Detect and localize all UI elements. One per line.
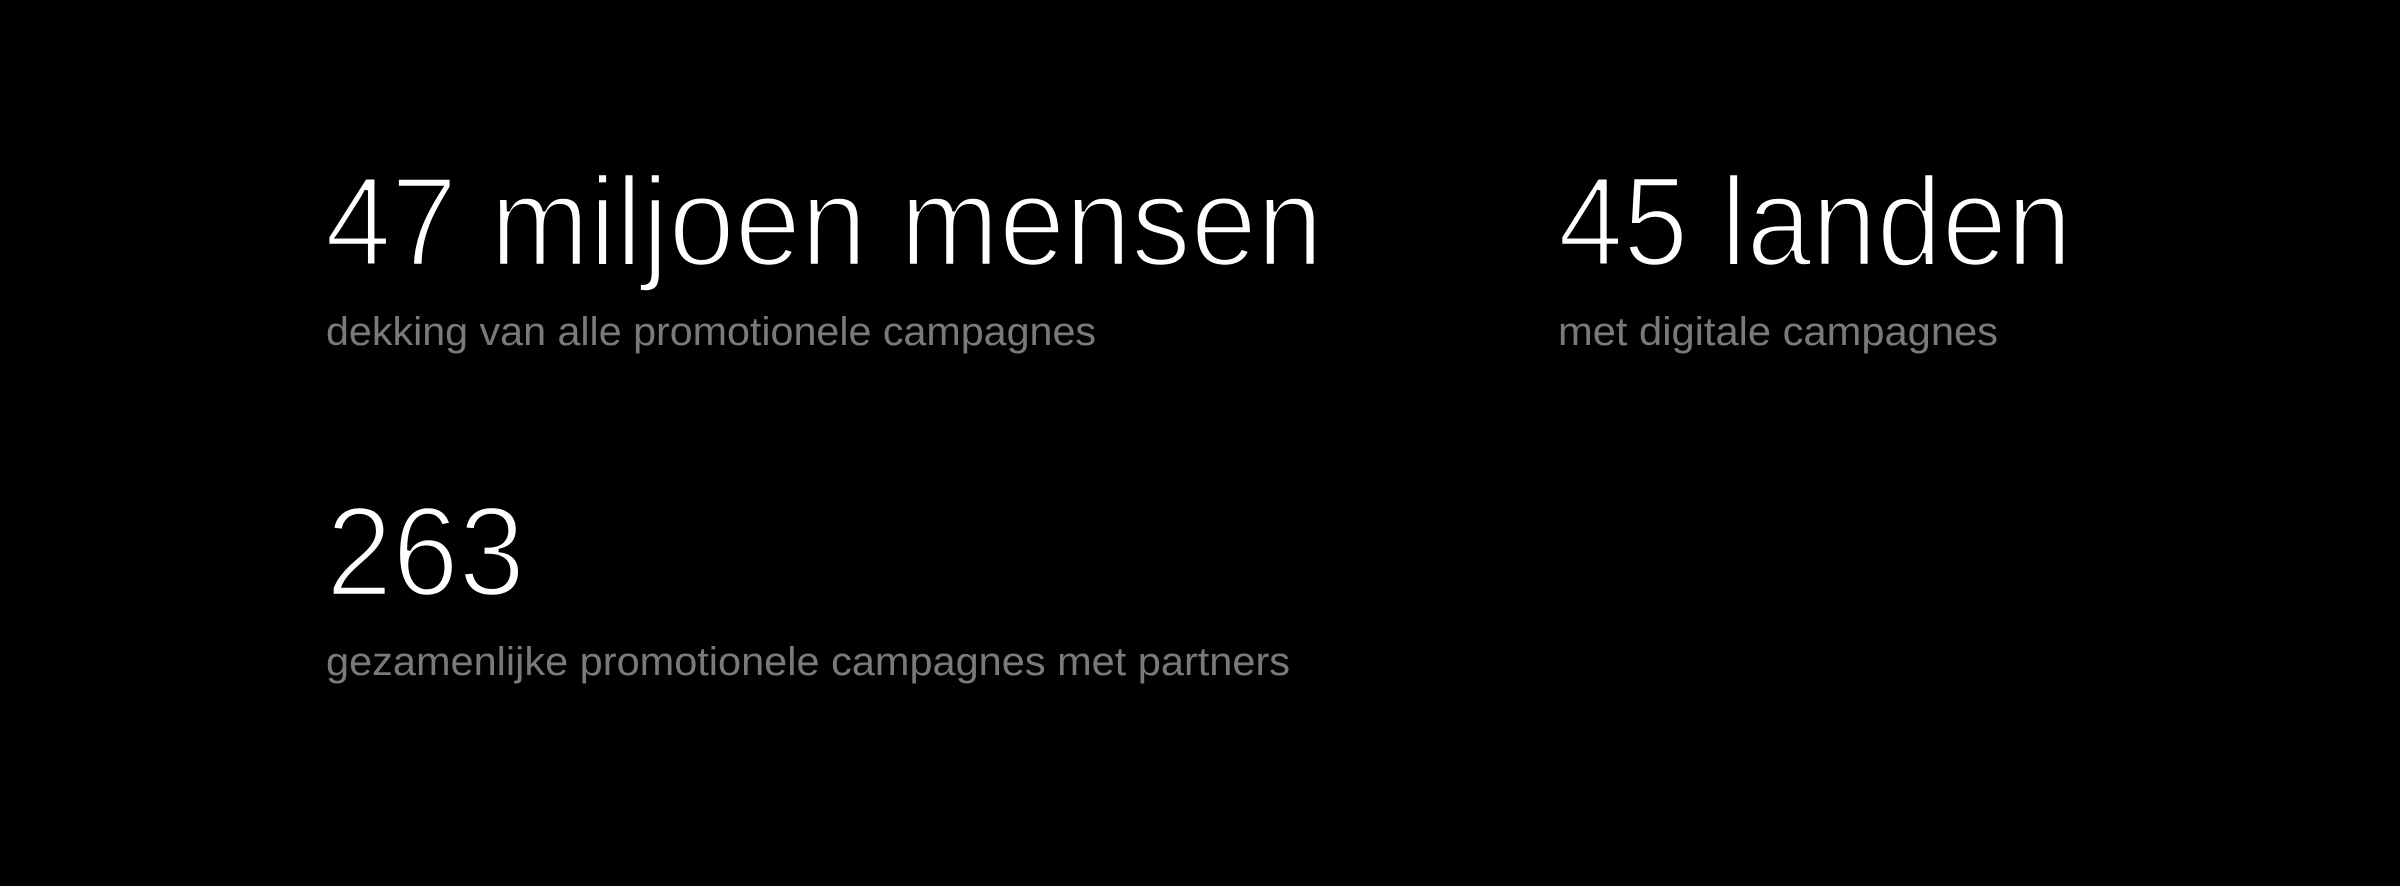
stat: 263 <box>326 480 1290 684</box>
description: promotional campaign coverage: dekking van alle promotionele campagnes <box>326 310 1096 354</box>
heading: 263: 263 <box>326 480 525 622</box>
description: digital campaigns: met digitale campagnes <box>1558 310 1998 354</box>
heading: 47 miljoen mensen: 47 miljoen mensen <box>325 150 1323 292</box>
description: joint campaigns with partners: gezamenlijke promotionele campagnes met partners <box>326 640 1290 684</box>
stat: 47 miljoen mensen <box>325 150 1323 354</box>
heading: 45 landen: 45 landen <box>1558 150 2072 292</box>
stat: 45 landen <box>1558 150 2072 354</box>
